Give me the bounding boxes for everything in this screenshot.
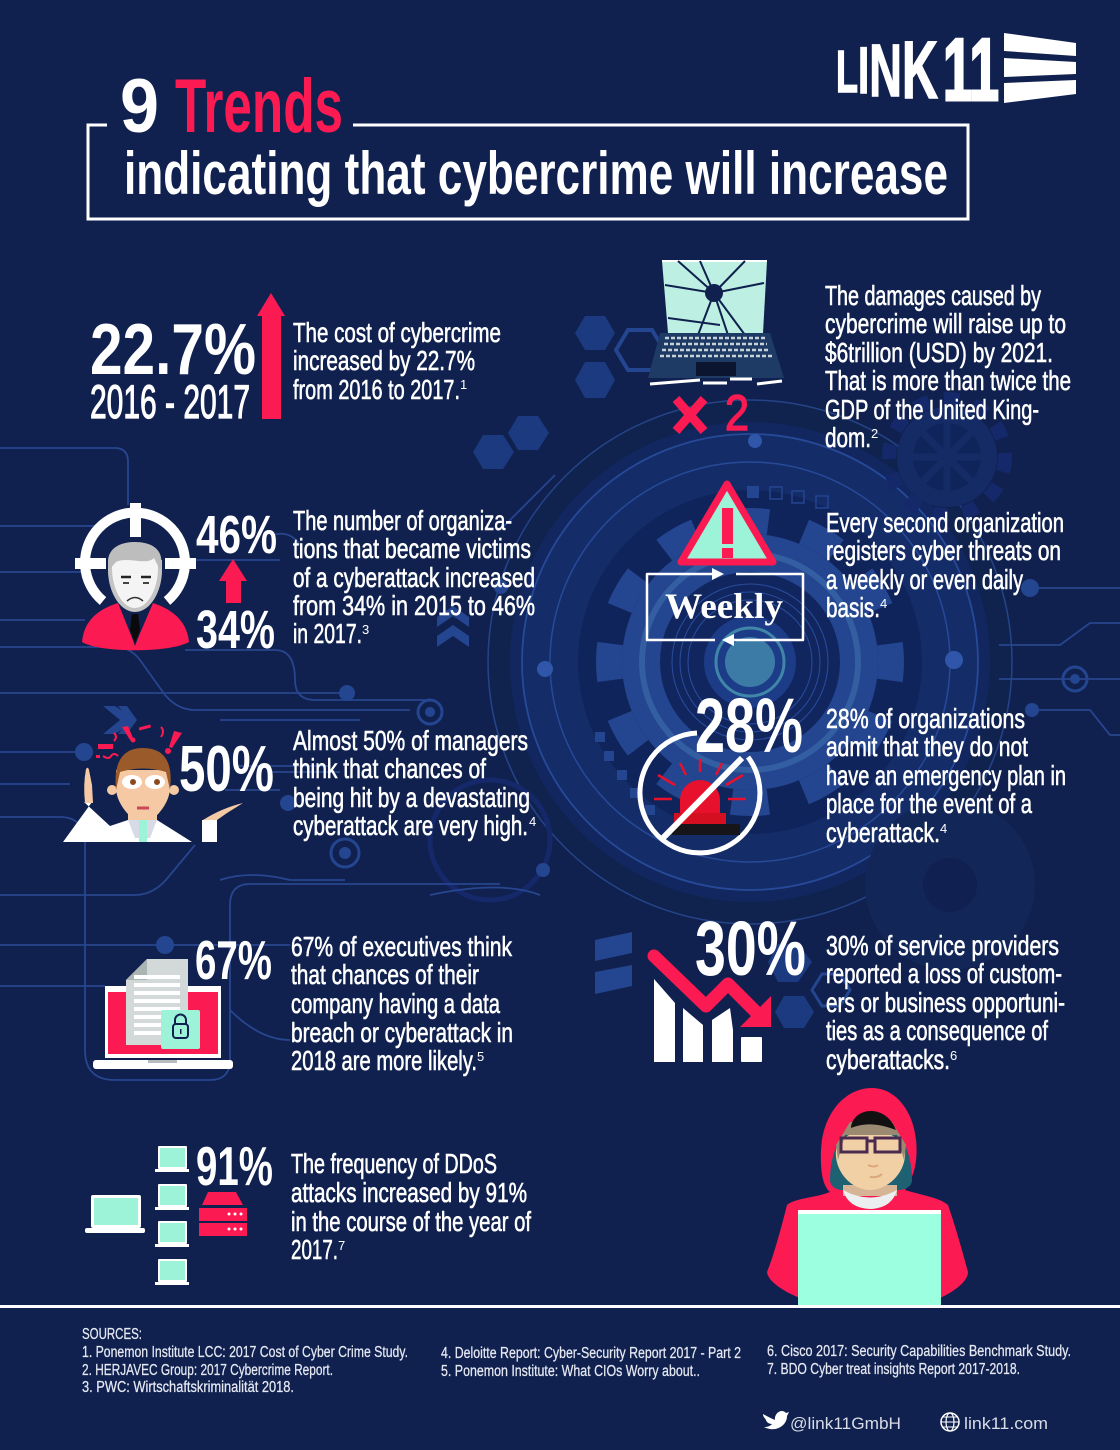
text: cost of cybercrime: 1 bbox=[460, 377, 467, 392]
sources: SOURCES: bbox=[82, 1326, 142, 1343]
text: executives: 67% of executives think bbox=[291, 931, 513, 962]
text: managers: 4 bbox=[529, 814, 536, 829]
text: emergency plan: 4 bbox=[940, 821, 947, 836]
text: executives: company having a data bbox=[291, 988, 500, 1019]
icon: warning and weekly cycle bbox=[647, 484, 803, 646]
text: damages: GDP of the United King- bbox=[825, 394, 1039, 425]
text: organizations victims: tions that became victims bbox=[293, 533, 531, 564]
background circuit and gear pattern bbox=[0, 316, 1120, 1080]
text: DDoS: 2017. bbox=[291, 1234, 338, 1265]
text: service providers bbox=[826, 930, 1065, 1075]
title: 9 bbox=[120, 64, 159, 149]
icon: warning and weekly cycle: Weekly bbox=[665, 586, 783, 626]
text: DDoS: The frequency of DDoS bbox=[291, 1148, 497, 1179]
stat: 22.7%: 2016 - 2017 bbox=[90, 375, 250, 428]
text: managers: being hit by a devastating bbox=[293, 782, 530, 813]
text: DDoS: in the course of the year of bbox=[291, 1206, 531, 1237]
sources bbox=[82, 1326, 1071, 1396]
logo: LINK 11: N bbox=[869, 29, 902, 112]
text: cost of cybercrime: The cost of cybercrime bbox=[293, 317, 501, 348]
text: damages: dom. bbox=[825, 422, 871, 453]
text: emergency plan: place for the event of a bbox=[826, 788, 1032, 819]
text: organizations victims: from 34% in 2015 to 46% bbox=[293, 590, 535, 621]
stat: 67%: 67% bbox=[195, 929, 272, 991]
icon: laptop with locked document bbox=[93, 959, 233, 1069]
text: DDoS: 7 bbox=[338, 1238, 345, 1253]
text: managers bbox=[293, 725, 536, 841]
stat: 46% and 34%: 46% bbox=[196, 505, 277, 565]
text: managers: cyberattack are very high. bbox=[293, 810, 528, 841]
logo: LINK 11: K bbox=[902, 25, 938, 116]
sources: 7. BDO Cyber treat insights Report 2017-2018. bbox=[767, 1361, 1020, 1378]
stat: 28%: 28% bbox=[695, 683, 803, 769]
sources: 2. HERJAVEC Group: 2017 Cybercrime Report. bbox=[82, 1362, 333, 1379]
text: emergency plan: 28% of organizations bbox=[826, 703, 1025, 734]
text: damages bbox=[825, 280, 1071, 453]
stat: 22.7%: 22.7% bbox=[90, 310, 256, 390]
text: service providers: 6 bbox=[950, 1048, 957, 1063]
sources: 3. PWC: Wirtschaftskriminalität 2018. bbox=[82, 1379, 294, 1396]
icon: cracked laptop times two: 2 bbox=[725, 385, 749, 441]
social: website: link11.com bbox=[964, 1414, 1048, 1433]
text: executives: breach or cyberattack in bbox=[291, 1017, 513, 1048]
text: emergency plan: admit that they do not bbox=[826, 731, 1028, 762]
icon: alarm prohibited bbox=[640, 733, 760, 853]
text: organizations victims: The number of organiza- bbox=[293, 505, 512, 536]
logo: LINK 11 bbox=[836, 20, 1076, 119]
text: every second organization: basis. bbox=[826, 592, 880, 623]
text: executives bbox=[291, 931, 513, 1076]
text: service providers: cyberattacks. bbox=[826, 1044, 950, 1075]
social: twitter bbox=[763, 1411, 901, 1433]
text: organizations victims: 3 bbox=[362, 622, 369, 637]
stat: 46% and 34%: 34% bbox=[196, 600, 275, 660]
footer divider bbox=[0, 1305, 1120, 1308]
stat: 30%: 30% bbox=[695, 906, 806, 992]
icon: person in crosshair bbox=[75, 503, 196, 650]
text: organizations victims: in 2017. bbox=[293, 618, 362, 649]
text: damages: 2 bbox=[871, 426, 878, 441]
logo: LINK 11: 11 bbox=[943, 20, 999, 119]
text: cost of cybercrime: from 2016 to 2017. bbox=[293, 374, 460, 405]
text: every second organization: 4 bbox=[880, 596, 887, 611]
text: emergency plan bbox=[826, 703, 1066, 848]
stat: 46% and 34% bbox=[196, 505, 277, 660]
sources: 5. Ponemon Institute: What CIOs Worry about.. bbox=[441, 1363, 700, 1380]
text: cost of cybercrime: increased by 22.7% bbox=[293, 345, 475, 376]
illustration: hacker bbox=[767, 1088, 968, 1306]
text: organizations victims: of a cyberattack increased bbox=[293, 562, 535, 593]
icon: falling chart bbox=[654, 956, 771, 1062]
sources: 1. Ponemon Institute LCC: 2017 Cost of Cyber Crime Study. bbox=[82, 1344, 408, 1361]
logo: LINK 11: L bbox=[836, 39, 858, 105]
sources: 4. Deloitte Report: Cyber-Security Report 2017 - Part 2 bbox=[441, 1345, 741, 1362]
title bbox=[88, 64, 968, 219]
text: emergency plan: cyberattack. bbox=[826, 817, 940, 848]
text: executives: 2018 are more likely. bbox=[291, 1045, 477, 1076]
icon: stressed manager bbox=[63, 725, 243, 842]
logo: LINK 11: I bbox=[858, 33, 869, 107]
text: executives: 5 bbox=[477, 1049, 484, 1064]
stat: 50%: 50% bbox=[179, 732, 274, 805]
text: cost of cybercrime bbox=[293, 317, 501, 405]
icon: laptops attacking server bbox=[85, 1146, 247, 1285]
text: executives: that chances of their bbox=[291, 959, 479, 990]
text: DDoS: attacks increased by 91% bbox=[291, 1177, 527, 1208]
text: managers: Almost 50% of managers bbox=[293, 725, 528, 756]
text: DDoS bbox=[291, 1148, 531, 1265]
text: every second organization: a weekly or even daily bbox=[826, 564, 1023, 595]
social: twitter: @link11GmbH bbox=[790, 1414, 901, 1433]
text: organizations victims bbox=[293, 505, 535, 649]
text: managers: think that chances of bbox=[293, 753, 486, 784]
stat: 91%: 91% bbox=[196, 1135, 273, 1197]
text: every second organization bbox=[826, 507, 1064, 623]
icon: cracked laptop times two bbox=[648, 261, 784, 441]
stat: 22.7% bbox=[90, 293, 285, 428]
title: Trends bbox=[175, 64, 343, 149]
